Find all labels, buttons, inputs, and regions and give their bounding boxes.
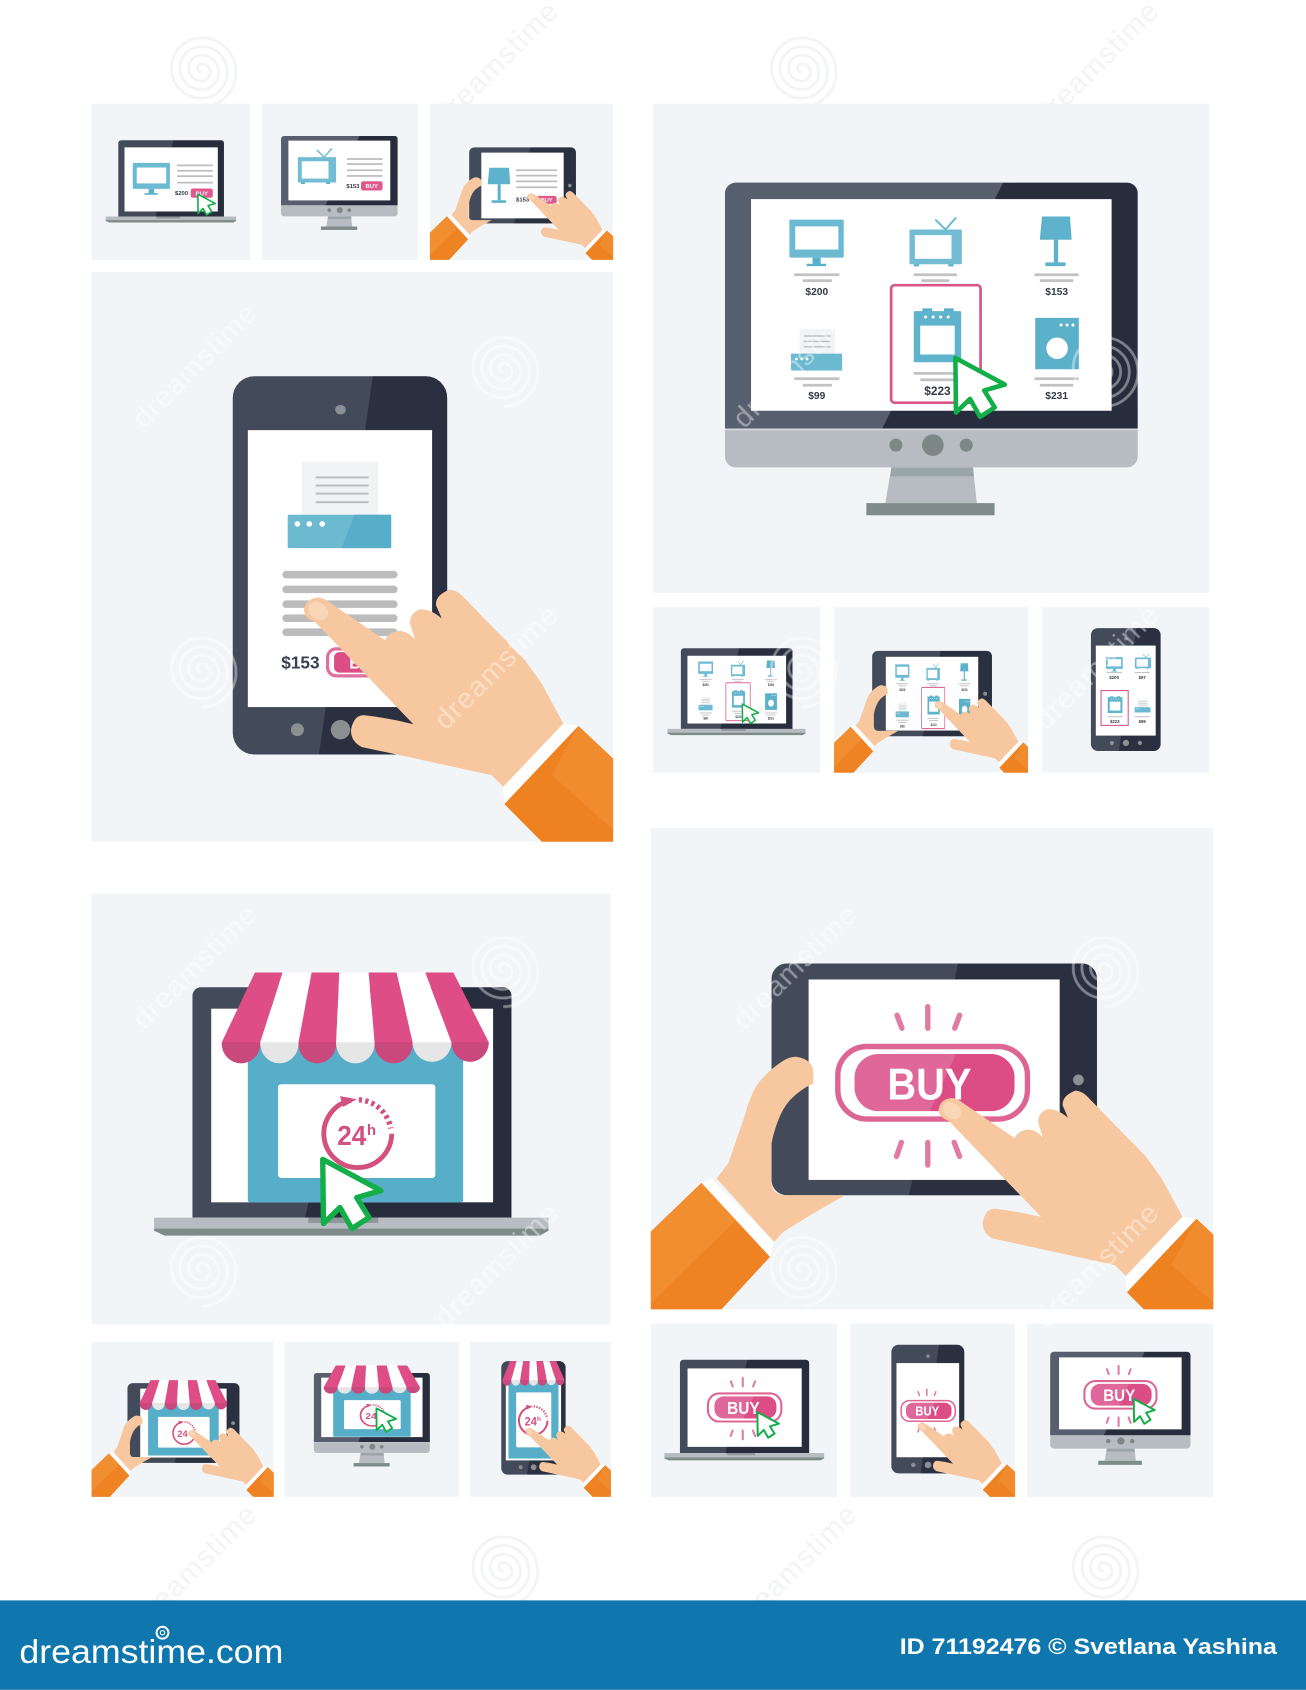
device: monitor bbox=[725, 183, 1138, 515]
cursor bbox=[757, 1412, 779, 1438]
device: laptop bbox=[154, 987, 548, 1236]
watermark text: dreamstime bbox=[727, 297, 864, 434]
buy button bbox=[901, 1389, 955, 1434]
device: monitor bbox=[281, 136, 398, 230]
panel: tablet product detail thumbnail bbox=[430, 104, 614, 260]
awning bbox=[502, 1361, 565, 1386]
cursor bbox=[955, 358, 1005, 417]
panel: phone buy thumbnail bbox=[850, 1324, 1016, 1497]
prices: $200 bbox=[805, 287, 828, 298]
buy button: BUY bbox=[366, 184, 378, 190]
icon: lamp bbox=[488, 168, 510, 203]
product grid: $223 bbox=[735, 715, 742, 719]
panel: monitor product detail thumbnail bbox=[262, 104, 418, 260]
product grid: $153 bbox=[768, 683, 774, 687]
store bbox=[140, 1380, 227, 1456]
product grid: $231 bbox=[768, 716, 774, 721]
watermark text: dreamstime bbox=[1028, 1197, 1166, 1334]
store: 24 bbox=[177, 1429, 189, 1439]
product list: $223 bbox=[1110, 719, 1120, 724]
hand: left holding bbox=[80, 1416, 152, 1506]
panel: laptop online store 24h bbox=[92, 894, 611, 1324]
icon: retro tv bbox=[298, 148, 336, 184]
prices bbox=[805, 287, 1068, 402]
buy button bbox=[191, 189, 213, 198]
watermark text: dreamstime bbox=[1028, 598, 1166, 736]
panel: phone catalogue thumbnail bbox=[1042, 607, 1209, 772]
device: phone bbox=[891, 1345, 964, 1473]
store: 24 bbox=[365, 1411, 377, 1421]
icon: printer bbox=[288, 461, 391, 548]
store with awning and 24h clock: h bbox=[367, 1122, 376, 1139]
24h clock: h bbox=[537, 1416, 541, 1423]
product list: $99 bbox=[1139, 719, 1146, 724]
watermark text: dreamstime bbox=[428, 1197, 566, 1334]
hand: right pointing bbox=[527, 191, 627, 270]
panel: monitor store thumbnail bbox=[284, 1342, 459, 1496]
buy button bbox=[537, 196, 557, 204]
device: tablet bbox=[469, 147, 576, 223]
icon: monitor bbox=[133, 163, 170, 195]
buy button: BUY bbox=[727, 1399, 760, 1418]
hand: right pointing bbox=[188, 1428, 287, 1507]
prices: $231 bbox=[1045, 391, 1068, 402]
hand: left holding bbox=[818, 685, 898, 785]
buy button: BUY bbox=[915, 1405, 940, 1419]
device: monitor bbox=[314, 1373, 430, 1466]
panel: laptop buy thumbnail bbox=[651, 1324, 837, 1496]
watermark text: dreamstime bbox=[727, 1498, 864, 1636]
panel: monitor buy thumbnail bbox=[1027, 1324, 1213, 1496]
watermark text: dreamstime bbox=[428, 598, 566, 736]
cursor bbox=[198, 194, 215, 215]
cursor bbox=[742, 704, 759, 723]
buy button bbox=[1084, 1366, 1156, 1426]
device: laptop bbox=[664, 1360, 824, 1460]
panel: phone store thumbnail bbox=[470, 1342, 611, 1497]
prices: $223 bbox=[924, 384, 951, 398]
product list: $200 bbox=[1109, 675, 1120, 680]
device: phone bbox=[233, 376, 447, 754]
watermark text: dreamstime bbox=[126, 1498, 264, 1636]
buy button: BUY bbox=[195, 191, 208, 197]
device: laptop bbox=[106, 140, 236, 222]
cursor bbox=[1134, 1399, 1155, 1424]
product grid: $223 bbox=[931, 723, 937, 727]
watermark text: dreamstime bbox=[126, 898, 264, 1036]
price: $153 bbox=[516, 198, 530, 204]
prices: $153 bbox=[1045, 287, 1068, 298]
hand: pointing bbox=[526, 1426, 625, 1505]
store bbox=[324, 1365, 420, 1437]
store wall and window bbox=[508, 1379, 558, 1459]
product grid: $153 bbox=[962, 687, 968, 692]
store with awning and 24h clock: 24 bbox=[337, 1120, 367, 1151]
footer bar bbox=[0, 1600, 1306, 1690]
price: $200 bbox=[175, 191, 189, 197]
device: monitor bbox=[1050, 1352, 1191, 1465]
watermark text: dreamstime bbox=[126, 297, 264, 434]
panel: tablet buy button with two hands bbox=[650, 828, 1214, 1310]
hand: left holding bbox=[603, 1057, 845, 1358]
watermark text bbox=[126, 0, 1166, 1636]
store with awning and 24h clock bbox=[222, 972, 489, 1202]
panel: laptop catalogue thumbnail bbox=[653, 607, 820, 772]
product grid: $231 bbox=[962, 724, 968, 728]
device: tablet bbox=[127, 1383, 239, 1463]
product grid: $99 bbox=[703, 716, 708, 721]
buy button: BUY bbox=[349, 654, 384, 672]
buy button bbox=[838, 1007, 1027, 1165]
24h clock: 24 bbox=[525, 1415, 537, 1428]
product list bbox=[1101, 654, 1151, 725]
product grid: $200 bbox=[899, 687, 906, 692]
hand: right pointing bbox=[935, 698, 1045, 786]
footer logo: dreamstime.com bbox=[19, 1634, 283, 1671]
product grid bbox=[789, 216, 1079, 403]
device: phone bbox=[1091, 628, 1161, 751]
buy button bbox=[328, 649, 405, 676]
cursor bbox=[323, 1159, 381, 1229]
device: laptop bbox=[667, 648, 805, 735]
prices: $99 bbox=[808, 391, 826, 402]
buy button bbox=[708, 1378, 781, 1439]
product grid bbox=[895, 663, 970, 729]
product grid bbox=[698, 661, 777, 721]
cursor bbox=[376, 1408, 396, 1432]
text lines bbox=[516, 169, 557, 188]
panel: smartphone with printer product bbox=[92, 272, 614, 842]
buy button bbox=[361, 181, 383, 190]
buy button: BUY bbox=[1103, 1386, 1135, 1405]
watermark spirals bbox=[171, 38, 1138, 1606]
buy button: BUY bbox=[541, 198, 553, 204]
panel: monitor product catalogue bbox=[653, 104, 1209, 592]
panel: laptop product detail thumbnail bbox=[92, 104, 250, 260]
product grid: $200 bbox=[703, 683, 709, 687]
panel: tablet catalogue thumbnail bbox=[834, 607, 1028, 773]
product grid: $99 bbox=[900, 724, 905, 728]
hand: right pointing bbox=[938, 1091, 1261, 1347]
hand: pointing bbox=[918, 1420, 1029, 1509]
hand: pointing bbox=[304, 590, 647, 862]
device: phone bbox=[501, 1361, 566, 1475]
watermark text: dreamstime bbox=[727, 898, 864, 1036]
24h clock bbox=[519, 1405, 547, 1435]
price: $153 bbox=[346, 184, 360, 190]
device: tablet bbox=[772, 964, 1097, 1195]
hand: left holding bbox=[417, 177, 491, 271]
panel: tablet store thumbnail bbox=[92, 1342, 274, 1497]
buy button: BUY bbox=[887, 1060, 971, 1109]
product list: $97 bbox=[1139, 675, 1146, 680]
text lines bbox=[177, 165, 213, 183]
device: tablet bbox=[872, 651, 992, 736]
footer credit: ID 71192476 © Svetlana Yashina bbox=[900, 1634, 1277, 1659]
description lines bbox=[282, 571, 398, 636]
text lines bbox=[347, 158, 383, 177]
price: $153 bbox=[281, 652, 320, 672]
